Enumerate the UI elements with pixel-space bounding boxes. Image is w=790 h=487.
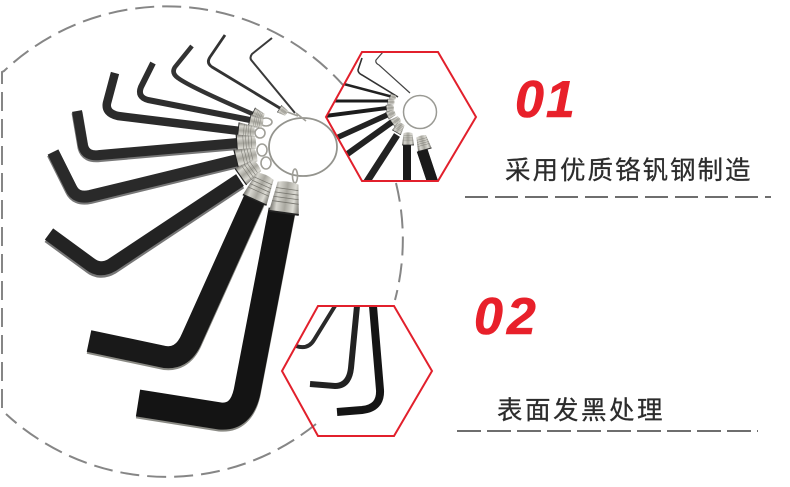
detail hexagon: key tips bbox=[282, 306, 432, 436]
key 9 bbox=[89, 200, 255, 359]
feature text 1: 采用优质铬钒钢制造 bbox=[505, 157, 753, 185]
number 01: 01 bbox=[515, 71, 577, 129]
key 4 bbox=[140, 63, 250, 120]
hexagon border 1 bbox=[326, 52, 476, 181]
key 5 bbox=[107, 73, 240, 131]
dashed divider 1 bbox=[465, 196, 771, 198]
key ring bbox=[269, 118, 337, 176]
detail hexagon: key ring bbox=[325, 52, 476, 183]
dashed divider 2 bbox=[457, 430, 758, 432]
key 2 bbox=[208, 35, 283, 110]
ferrules bbox=[234, 105, 303, 215]
key 6 bbox=[77, 112, 238, 157]
key 8 bbox=[49, 182, 240, 270]
feature text 2: 表面发黑处理 bbox=[497, 397, 665, 425]
mini ring bbox=[404, 96, 436, 128]
small links bbox=[255, 110, 306, 183]
key 3 bbox=[174, 46, 255, 115]
key 10 bbox=[138, 212, 282, 418]
dashed circle outline bbox=[2, 6, 403, 477]
mini keys bbox=[376, 52, 410, 93]
number 02: 02 bbox=[474, 288, 540, 346]
key 1 bbox=[250, 38, 295, 113]
hexagon border 2 bbox=[282, 306, 432, 436]
key 7 bbox=[53, 154, 238, 198]
hex key set photo bbox=[49, 35, 337, 418]
mini ferrules bbox=[390, 94, 397, 101]
